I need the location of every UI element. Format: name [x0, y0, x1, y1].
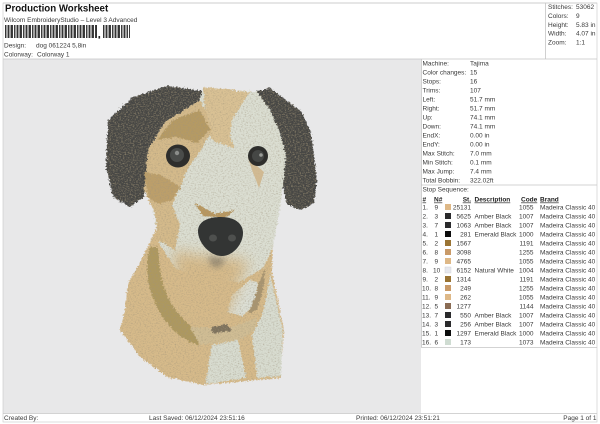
row 6: 6.: [422, 250, 428, 256]
panel: header: dog 061224 5,8in: [36, 42, 87, 50]
right eye: [248, 146, 268, 188]
row 14: Amber Black: [474, 322, 512, 328]
row 14: 14.: [422, 322, 431, 328]
panel: machine details: 51.7 mm: [470, 96, 495, 104]
panel: header: Colorway 1: [37, 52, 70, 58]
row 16: 16.: [422, 340, 431, 346]
row 7: Madeira Classic 40: [540, 258, 596, 266]
row 7: 4765: [457, 258, 471, 266]
footer: Last Saved: 06/12/2024 23:51:16: [149, 415, 245, 422]
panel: machine details: 7.4 mm: [470, 168, 492, 176]
row 4: Emerald Black: [474, 232, 517, 238]
panel: machine details: Down:: [422, 124, 441, 130]
row 3: 1063: [457, 222, 471, 230]
subtitle: Wilcom EmbroideryStudio – Level 3 Advanced: [4, 17, 138, 24]
row 10: 1255: [519, 286, 534, 292]
row 1: Madeira Classic 40: [540, 204, 596, 212]
row 16: Madeira Classic 40: [540, 340, 596, 346]
row 8: 8.: [422, 268, 428, 274]
row 1: 9: [434, 204, 438, 212]
row 12: 1277: [457, 304, 471, 310]
mouth shadow: [208, 256, 226, 268]
row 2: 5625: [457, 214, 471, 220]
row 15: 1297: [457, 330, 471, 338]
table header: Brand: [540, 196, 559, 204]
row 10: 8: [434, 286, 438, 292]
row 15: Madeira Classic 40: [540, 330, 596, 338]
row 11: Madeira Classic 40: [540, 294, 596, 302]
panel: machine details: Total Bobbin:: [422, 178, 460, 184]
panel: machine details: 74.1 mm: [470, 114, 495, 122]
panel: machine details: Color changes:: [422, 70, 466, 76]
panel: machine details: Right:: [422, 106, 440, 112]
row 13: [422, 312, 596, 320]
row 11: 262: [460, 294, 471, 302]
panel: machine details: Machine:: [422, 60, 449, 68]
row 16: 6: [434, 340, 438, 346]
panel: machine details: 0.00 in: [470, 132, 490, 140]
row 2: 3: [434, 214, 438, 220]
row 5: Madeira Classic 40: [540, 240, 596, 248]
row 13: 1007: [519, 312, 534, 320]
footer: Page 1 of 1: [563, 415, 597, 422]
panel: embroidery preview background: [3, 59, 421, 413]
row 12: Madeira Classic 40: [540, 304, 596, 310]
row 11: 1055: [519, 294, 534, 302]
row 12: 12.: [422, 304, 431, 310]
illustration: embroidered dog: [106, 86, 317, 385]
panel: machine details: 0.1 mm: [470, 160, 492, 166]
muzzle blend: [172, 250, 250, 322]
row 6: 3098: [457, 250, 471, 256]
panel: machine details: Trims:: [422, 88, 441, 94]
panel: machine details: 15: [470, 70, 478, 76]
row 2: 1007: [519, 214, 534, 220]
row 16: 173: [460, 340, 471, 346]
table header: #: [422, 196, 426, 204]
row 3: 1007: [519, 222, 534, 230]
row 7: [422, 258, 596, 266]
panel: design stats: Colors:: [548, 13, 569, 20]
row 2: Madeira Classic 40: [540, 214, 596, 220]
row 4: [422, 231, 596, 238]
head: [144, 87, 286, 322]
row 9: 9.: [422, 276, 428, 284]
panel: machine details: EndY:: [422, 142, 440, 148]
row 9: [422, 276, 596, 284]
panel: design stats: Stitches:: [548, 4, 573, 11]
row 14: [422, 321, 596, 328]
panel: machine details: 0.00 in: [470, 142, 490, 148]
row 4: 1000: [519, 232, 534, 238]
table header: Description: [474, 196, 510, 204]
row 15: 1000: [519, 330, 534, 338]
panel: machine details: Stops:: [422, 78, 441, 86]
row 1: 1.: [422, 204, 428, 212]
row 6: 8: [434, 250, 438, 256]
stop sequence heading: Stop Sequence:: [422, 186, 469, 194]
row 1: 25131: [453, 204, 471, 212]
row 16: [422, 339, 596, 346]
footer: Created By:: [4, 415, 39, 422]
nose: [198, 217, 243, 256]
row 7: 1055: [519, 258, 534, 266]
row 10: [422, 285, 596, 292]
row 11: 9: [434, 294, 438, 302]
panel: machine details: EndX:: [422, 132, 440, 140]
row 8: Natural White: [474, 268, 514, 274]
row 10: 10.: [422, 286, 431, 292]
collar: [147, 247, 265, 345]
panel: machine details: Min Stitch:: [422, 160, 453, 166]
row 2: [422, 213, 596, 220]
row 14: 256: [460, 322, 471, 328]
right ear: [255, 88, 317, 210]
panel: machine details: 51.7 mm: [470, 106, 495, 112]
row 9: 2: [434, 276, 438, 284]
panel: design stats: [546, 3, 596, 59]
row 15: Emerald Black: [474, 330, 517, 338]
colorway: Colorway:: [4, 52, 33, 58]
row 7: 7.: [422, 258, 428, 266]
panel: design stats: 9: [576, 13, 580, 20]
row 4: Madeira Classic 40: [540, 232, 596, 238]
row 3: 7: [434, 222, 438, 230]
design name: Design:: [4, 42, 26, 50]
table header: [422, 196, 559, 204]
row 16: 1073: [519, 340, 534, 346]
panel: machine details: 7.0 mm: [470, 150, 492, 158]
panel: machine details: Max Jump:: [422, 168, 454, 176]
panel: header: [3, 3, 597, 59]
row 7: 9: [434, 258, 438, 266]
row 4: 4.: [422, 232, 428, 238]
row 12: [422, 303, 596, 310]
left eye: [166, 144, 190, 168]
row 8: 10: [433, 268, 441, 274]
panel: machine details: 322.02ft: [470, 178, 494, 184]
panel: machine details: 74.1 mm: [470, 124, 495, 130]
title: Production Worksheet: [5, 4, 109, 14]
row 13: 13.: [422, 312, 431, 320]
row 9: 1191: [520, 276, 534, 284]
table header: Code: [521, 196, 538, 204]
row 14: 1007: [519, 322, 534, 328]
row 13: Amber Black: [474, 312, 512, 320]
footer: Printed: 06/12/2024 23:51:21: [356, 415, 440, 422]
row 3: Amber Black: [474, 222, 512, 230]
row 13: Madeira Classic 40: [540, 312, 596, 320]
row 6: Madeira Classic 40: [540, 250, 596, 256]
row 11: [422, 294, 596, 302]
row 1: [422, 204, 596, 212]
panel: design stats: 5.83 in: [576, 22, 596, 29]
row 13: 7: [434, 312, 438, 320]
row 3: Madeira Classic 40: [540, 222, 596, 230]
row 6: 1255: [519, 250, 534, 256]
panel: design stats: Width:: [548, 30, 567, 38]
row 3: [422, 222, 596, 230]
row 2: Amber Black: [474, 214, 512, 220]
row 5: [422, 240, 596, 248]
row 3: 3.: [422, 222, 428, 230]
table: stop sequence: [422, 196, 596, 346]
row 8: 6152: [457, 268, 471, 274]
row 11: 11.: [422, 294, 431, 302]
row 6: [422, 249, 596, 256]
row 1: 1055: [519, 204, 534, 212]
row 13: 550: [460, 312, 471, 320]
panel: design stats: Zoom:: [548, 40, 567, 46]
row 2: 2.: [422, 214, 428, 220]
panel: design stats: 1:1: [576, 40, 585, 46]
panel: machine details: Max Stitch:: [422, 150, 455, 158]
row 5: 1567: [457, 240, 471, 248]
panel: machine details: 16: [470, 78, 478, 86]
dog body and chest: [120, 215, 284, 385]
barcode: [5, 25, 130, 39]
panel: design stats: 53062: [576, 4, 594, 11]
table header: N#: [434, 196, 443, 204]
panel: machine details: [422, 59, 495, 347]
row 15: 15.: [422, 330, 431, 338]
row 9: 1314: [457, 276, 471, 284]
row 14: Madeira Classic 40: [540, 322, 596, 328]
row 5: 5.: [422, 240, 428, 248]
row 8: 1004: [519, 268, 534, 274]
panel: machine details: Tajima: [470, 60, 489, 68]
row 14: 3: [434, 322, 438, 328]
panel: machine details: 107: [470, 88, 481, 94]
row 15: [422, 330, 596, 338]
row 5: 2: [434, 240, 438, 248]
row 4: 1: [434, 232, 438, 238]
row 12: 5: [434, 304, 438, 310]
row 15: 1: [434, 330, 438, 338]
table header: St.: [463, 196, 471, 204]
footer: [4, 415, 597, 422]
panel: design stats: 4.07 in: [576, 30, 596, 38]
row 5: 1191: [520, 240, 534, 248]
row 10: 249: [460, 286, 471, 292]
row 9: Madeira Classic 40: [540, 276, 596, 284]
row 12: 1144: [520, 304, 534, 310]
panel: machine details: Left:: [422, 96, 435, 104]
left ear: [106, 86, 203, 207]
row 10: Madeira Classic 40: [540, 286, 596, 292]
row 4: 281: [460, 232, 471, 238]
panel: machine details: Up:: [422, 114, 433, 122]
row 8: [422, 267, 596, 274]
panel: design stats: Height:: [548, 22, 569, 29]
row 8: Madeira Classic 40: [540, 268, 596, 274]
